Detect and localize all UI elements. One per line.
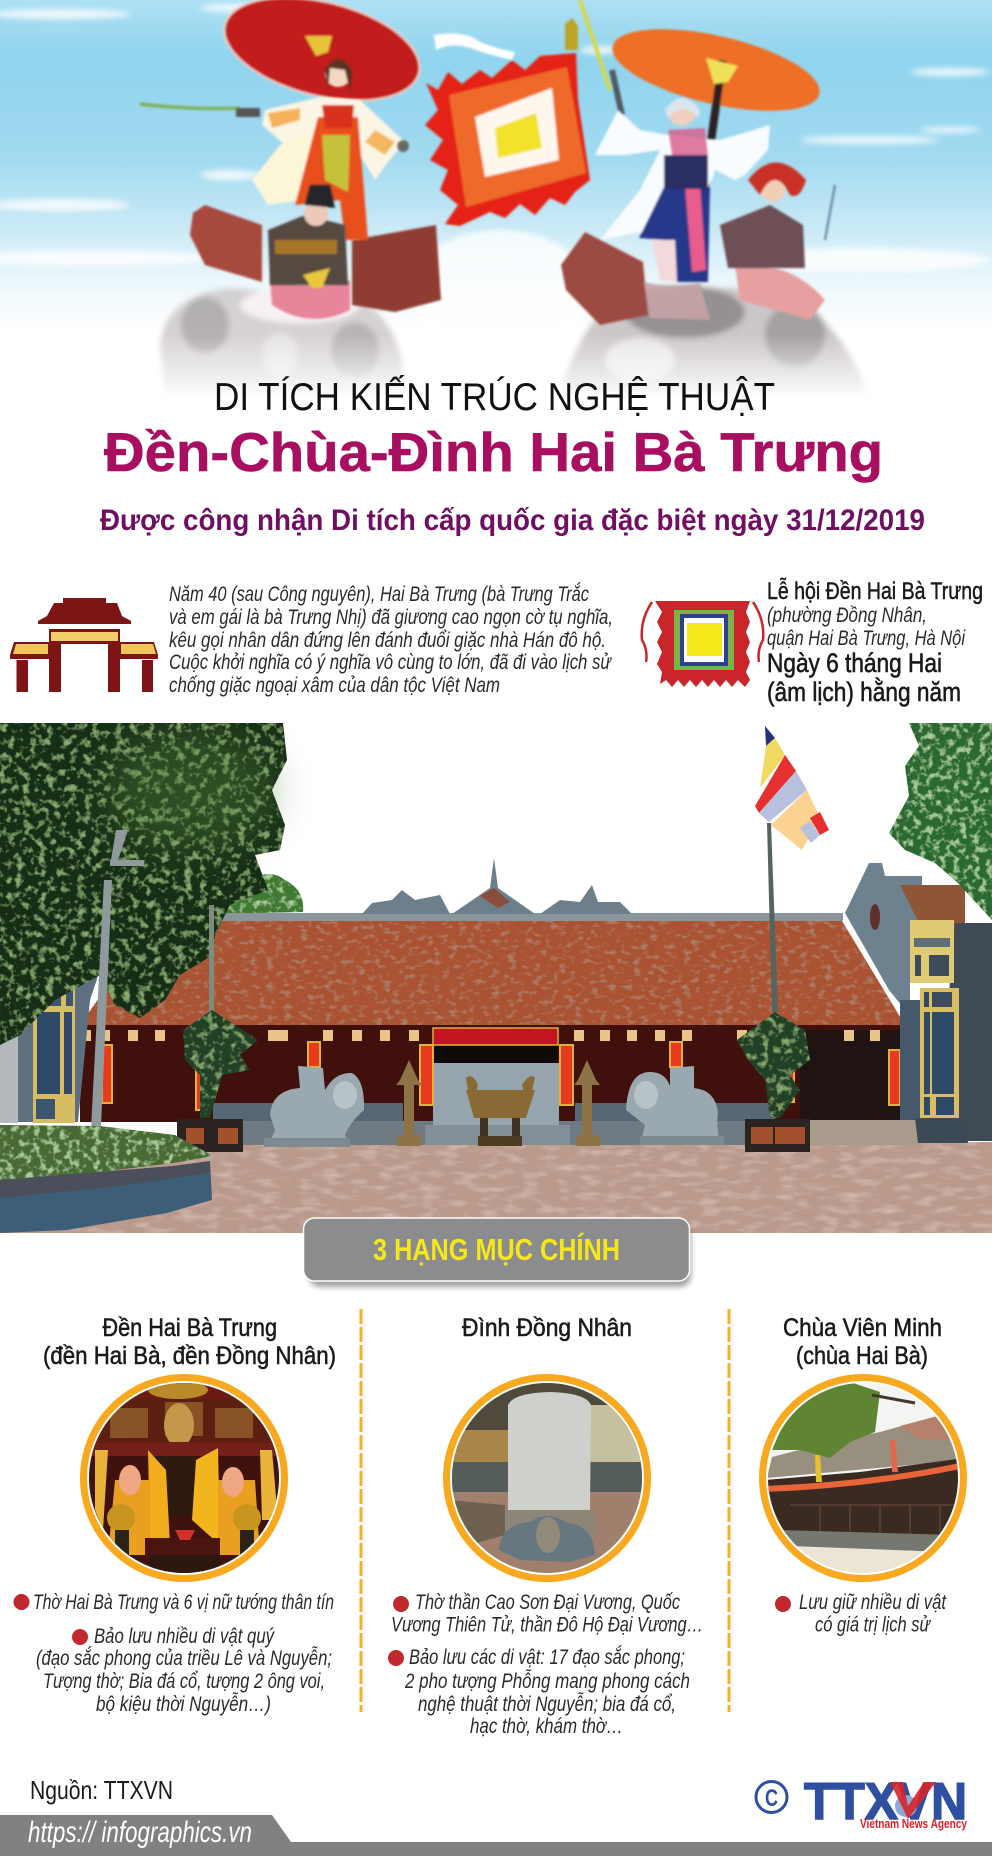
far right column bbox=[945, 923, 992, 1141]
right gate pillar bbox=[900, 920, 968, 1143]
photo: stele on turtle bbox=[452, 1383, 642, 1573]
text 2: Bảo lưu các di vật: 17 đạo sắc phong; bbox=[409, 1646, 685, 1669]
painting: two queens on elephants over sky bbox=[0, 0, 992, 400]
tree left bbox=[0, 723, 287, 1045]
column 2 bbox=[388, 1314, 703, 1738]
festival text bbox=[767, 578, 983, 707]
lamp post bbox=[90, 830, 144, 1148]
heading 1: (đền Hai Bà, đền Đồng Nhân) bbox=[43, 1342, 336, 1370]
photo: pagoda bbox=[768, 1383, 958, 1573]
roof ridge bbox=[178, 913, 843, 921]
festival text: (âm lịch) hằng năm bbox=[767, 676, 961, 707]
left gate pillar bbox=[0, 976, 98, 1123]
back roof bbox=[900, 885, 965, 935]
howdahs bbox=[190, 205, 825, 325]
dividers bbox=[361, 1309, 729, 1712]
heading 1: Đền Hai Bà Trưng bbox=[102, 1314, 277, 1342]
ring 2 bbox=[446, 1378, 648, 1578]
intro paragraph: Cuộc khởi nghĩa có ý nghĩa vô cùng to lớn, đã đi vào lịch sử bbox=[169, 651, 612, 674]
right soldier bbox=[720, 162, 835, 268]
right gable bbox=[845, 863, 922, 1016]
source: Nguồn: TTXVN bbox=[30, 1775, 173, 1805]
right queen bbox=[595, 98, 770, 282]
bonsai right bbox=[737, 1012, 810, 1118]
text 2: Thờ thần Cao Sơn Đại Vương, Quốc bbox=[415, 1591, 680, 1614]
red pillars bbox=[102, 1042, 900, 1110]
left umbrella bbox=[214, 0, 430, 119]
back tree bbox=[226, 874, 304, 913]
photo: altar bbox=[89, 1383, 279, 1573]
intro paragraph: kêu gọi nhân dân đứng lên đánh đuổi giặc nhà Hán đô hộ. bbox=[169, 629, 606, 652]
text 2: 2 pho tượng Phỗng mang phong cách bbox=[404, 1670, 690, 1693]
thin post bbox=[209, 905, 214, 1012]
text 2: nghệ thuật thời Nguyễn; bia đá cổ, bbox=[418, 1693, 676, 1716]
website url: https:// infographics.vn bbox=[28, 1816, 252, 1849]
heading 3: (chùa Hai Bà) bbox=[796, 1342, 928, 1370]
right umbrella bbox=[605, 13, 827, 190]
bonsai left bbox=[183, 1010, 258, 1118]
grass bbox=[0, 1125, 213, 1180]
lanterns bbox=[396, 1060, 600, 1146]
battle flag bbox=[425, 0, 622, 226]
text 1: bộ kiệu thời Nguyễn…) bbox=[96, 1693, 271, 1716]
text 3: Lưu giữ nhiều di vật bbox=[799, 1591, 947, 1614]
title line 1: DI TÍCH KIẾN TRÚC NGHỆ THUẬT bbox=[214, 375, 775, 419]
intro paragraph: và em gái là bà Trưng Nhị) đã giương cao ngọn cờ tụ nghĩa, bbox=[169, 606, 613, 629]
banner bbox=[433, 1028, 558, 1045]
section banner bbox=[304, 1218, 691, 1287]
gable window bbox=[870, 904, 880, 930]
festival text: (phường Đồng Nhân, bbox=[767, 604, 927, 627]
column 1 bbox=[14, 1314, 336, 1716]
buddhist flag bbox=[755, 726, 829, 850]
urn bbox=[466, 1076, 535, 1146]
planters bbox=[177, 1119, 243, 1152]
text 1: Thờ Hai Bà Trưng và 6 vị nữ tướng thân tín bbox=[33, 1591, 334, 1614]
ground bbox=[0, 1142, 992, 1234]
copyright mark bbox=[756, 1782, 787, 1812]
flagpole bbox=[767, 823, 778, 1012]
intro paragraph: chống giặc ngoại xâm của dân tộc Việt Nam bbox=[169, 674, 500, 697]
intro paragraph: Năm 40 (sau Công nguyên), Hai Bà Trưng (bà Trưng Trắc bbox=[169, 583, 589, 606]
text 1: Tượng thờ; Bia đá cổ, tượng 2 ông voi, bbox=[43, 1670, 325, 1693]
tree right bbox=[889, 723, 992, 920]
logo: TTXVN bbox=[804, 1773, 967, 1831]
wall under roof bbox=[80, 1025, 905, 1122]
stone elephants bbox=[264, 1066, 724, 1147]
heading 1 bbox=[43, 1314, 336, 1370]
stone bed bbox=[0, 1161, 212, 1233]
title line 2: Đền-Chùa-Đình Hai Bà Trưng bbox=[104, 421, 883, 483]
text 2: Vương Thiên Tử, thần Đô Hộ Đại Vương… bbox=[391, 1614, 703, 1636]
icon: temple gate bbox=[10, 598, 158, 692]
text 1: Bảo lưu nhiều di vật quý bbox=[94, 1625, 275, 1648]
heading 3 bbox=[783, 1314, 942, 1370]
text 1: (đạo sắc phong của triều Lê và Nguyễn; bbox=[36, 1647, 332, 1670]
roof bbox=[80, 921, 905, 1025]
text 2 bbox=[388, 1591, 703, 1738]
subtitle: Được công nhận Di tích cấp quốc gia đặc biệt ngày 31/12/2019 bbox=[100, 504, 925, 537]
intro paragraph bbox=[169, 583, 613, 697]
text 2: hạc thờ, khám thờ… bbox=[470, 1715, 623, 1738]
photo: temple front bbox=[0, 723, 992, 1234]
hanging flags bbox=[81, 1030, 880, 1041]
text 3: có giá trị lịch sử bbox=[815, 1614, 931, 1636]
ring 3 bbox=[762, 1378, 964, 1578]
heading 3: Chùa Viên Minh bbox=[783, 1314, 942, 1342]
stele wall bbox=[433, 1063, 559, 1125]
lighter crown bbox=[105, 730, 275, 850]
column 3 bbox=[762, 1314, 965, 1636]
section banner: 3 HẠNG MỤC CHÍNH bbox=[373, 1232, 620, 1267]
icon: festival flag bbox=[642, 601, 763, 687]
right elephant bbox=[560, 285, 868, 395]
heading 2: Đình Đồng Nhân bbox=[462, 1314, 632, 1342]
left queen bbox=[140, 59, 409, 240]
left soldier bbox=[268, 185, 348, 288]
roof ornament bbox=[362, 858, 632, 914]
text 1 bbox=[14, 1591, 334, 1716]
bullet bbox=[14, 1594, 30, 1610]
festival text: Ngày 6 tháng Hai bbox=[767, 648, 942, 678]
text 3 bbox=[775, 1591, 947, 1636]
ring 1 bbox=[84, 1378, 284, 1578]
copyright mark: C bbox=[765, 1785, 778, 1812]
left elephant bbox=[160, 287, 405, 395]
plinth bbox=[213, 1103, 403, 1121]
footer bar bbox=[0, 1815, 992, 1856]
